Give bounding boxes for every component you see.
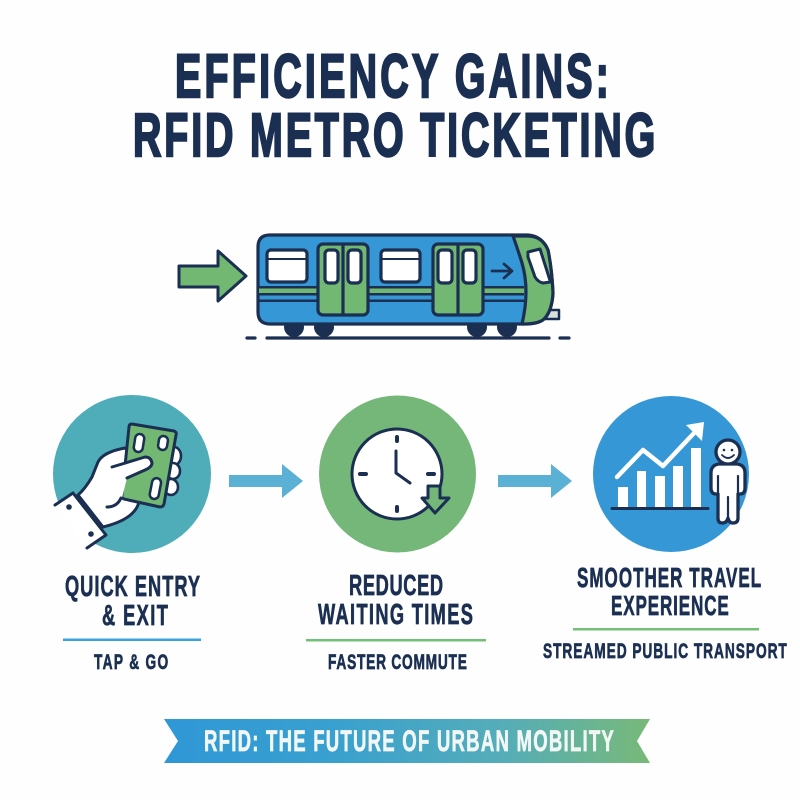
icon circle: growth chart and passenger bbox=[593, 396, 749, 552]
bars bbox=[618, 448, 701, 507]
window 2 bbox=[381, 250, 420, 282]
door 2 bbox=[433, 244, 483, 315]
baseline bbox=[612, 507, 708, 510]
text block: quick entry: & EXIT bbox=[102, 600, 168, 632]
text block: smoother travel: EXPERIENCE bbox=[611, 590, 729, 621]
text block: smoother travel bbox=[543, 562, 787, 663]
wheels bbox=[284, 317, 517, 337]
carriage body bbox=[258, 235, 553, 324]
track bbox=[247, 336, 569, 340]
icon: green direction arrow bbox=[179, 251, 246, 301]
arrow: step 2 to 3 bbox=[498, 464, 572, 498]
window 1 bbox=[267, 250, 307, 282]
card bbox=[122, 424, 176, 507]
hand bbox=[78, 448, 150, 527]
bumper bbox=[544, 310, 559, 319]
banner bbox=[164, 719, 650, 763]
trend arrow bbox=[617, 422, 704, 477]
text block: reduced waiting times bbox=[306, 570, 486, 674]
text block: reduced waiting times: FASTER COMMUTE bbox=[328, 650, 467, 674]
illustration: metro train bbox=[247, 235, 569, 338]
door 1 bbox=[318, 244, 368, 315]
body stripes bbox=[259, 286, 524, 302]
text block: smoother travel: STREAMED PUBLIC TRANSPORT bbox=[543, 639, 787, 663]
down arrow bbox=[422, 486, 449, 513]
train nose bbox=[513, 236, 553, 324]
arrow: step 1 to 2 bbox=[229, 464, 303, 498]
direction arrow on train bbox=[492, 264, 512, 278]
cuff bbox=[55, 493, 106, 548]
text block: quick entry bbox=[63, 571, 201, 674]
fingers bbox=[164, 447, 181, 495]
title: EFFICIENCY GAINS: bbox=[175, 41, 609, 110]
nose window bbox=[528, 249, 550, 283]
text block: reduced waiting times: WAITING TIMES bbox=[318, 599, 473, 631]
title bbox=[133, 41, 655, 169]
text block: quick entry: TAP & GO bbox=[94, 650, 168, 674]
passenger bbox=[711, 440, 745, 523]
banner: RFID: THE FUTURE OF URBAN MOBILITY bbox=[204, 725, 614, 758]
title: RFID METRO TICKETING bbox=[133, 100, 655, 169]
thumb bbox=[100, 457, 152, 510]
text block: smoother travel: SMOOTHER TRAVEL bbox=[577, 562, 761, 593]
text block: reduced waiting times: REDUCED bbox=[349, 570, 443, 602]
text block: quick entry: QUICK ENTRY bbox=[65, 571, 200, 603]
icon circle: clock bbox=[319, 396, 476, 552]
icon circle: hand tapping card bbox=[53, 395, 211, 553]
